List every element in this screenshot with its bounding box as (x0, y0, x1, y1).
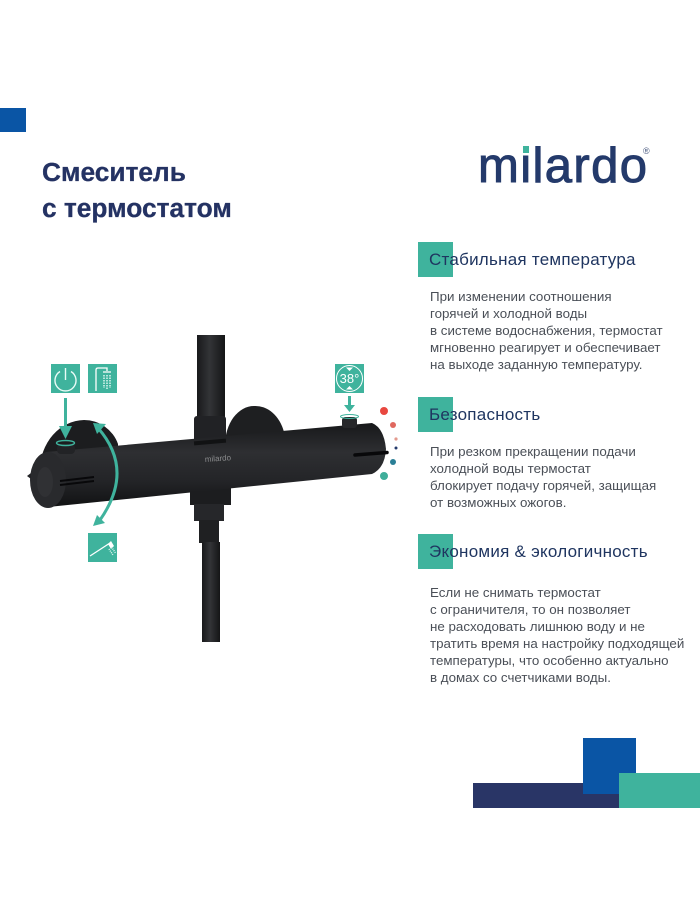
heading: Экономия & экологичность (429, 542, 648, 561)
corner accent square (0, 108, 26, 132)
accent square (418, 242, 453, 277)
blue square (583, 738, 636, 794)
body text: в домах со счетчиками воды. (430, 670, 611, 685)
faucet illustration (27, 335, 398, 642)
temperature dots (380, 407, 398, 480)
body text: на выходе заданную температуру. (430, 357, 642, 372)
heading: Безопасность (429, 405, 540, 424)
panel: economy (418, 534, 684, 685)
body text: горячей и холодной воды (430, 306, 587, 321)
logo: milardo: ® (643, 146, 650, 156)
body text: тратить время на настройку подходящей (430, 636, 684, 651)
body text: температуры, что особенно актуально (430, 653, 669, 668)
icon: overhead shower (88, 364, 117, 393)
navy bar (473, 783, 623, 808)
title: Смеситель (42, 157, 186, 187)
icon: 38 degrees: 38° (340, 371, 359, 386)
body text: При изменении соотношения (430, 289, 612, 304)
body text: от возможных ожогов. (430, 495, 566, 510)
body text: в системе водоснабжения, термостат (430, 323, 663, 338)
teal bar (619, 773, 700, 808)
icon: power button (51, 364, 80, 393)
title: с термостатом (42, 193, 232, 223)
accent square (418, 397, 453, 432)
body text: не расходовать лишнюю воду и не (430, 619, 645, 634)
arrow: down to temperature button (340, 396, 358, 418)
panel: safety (418, 397, 656, 510)
panel: stable temperature (418, 242, 663, 372)
arrow: curved double-headed switch (93, 423, 117, 526)
body text: мгновенно реагирует и обеспечивает (430, 340, 660, 355)
bottom decorative blocks (473, 738, 700, 808)
body text: Если не снимать термостат (430, 585, 601, 600)
body text (430, 585, 684, 685)
body text: блокирует подачу горячей, защищая (430, 478, 656, 493)
faucet: thermostat body (27, 417, 387, 508)
title (42, 157, 232, 223)
arrow: down to left button (56, 398, 74, 446)
body text: При резком прекращении подачи (430, 444, 636, 459)
body text (430, 444, 656, 510)
body text: холодной воды термостат (430, 461, 591, 476)
icon: 38 degrees (335, 364, 364, 393)
icon: hand shower (88, 533, 117, 562)
heading: Стабильная температура (429, 250, 636, 269)
accent square (418, 534, 453, 569)
body text: с ограничителя, то он позволяет (430, 602, 630, 617)
body text (430, 289, 663, 372)
faucet: thermostat body: milardo (205, 453, 232, 464)
faucet: riser pipe and hose (190, 335, 284, 642)
